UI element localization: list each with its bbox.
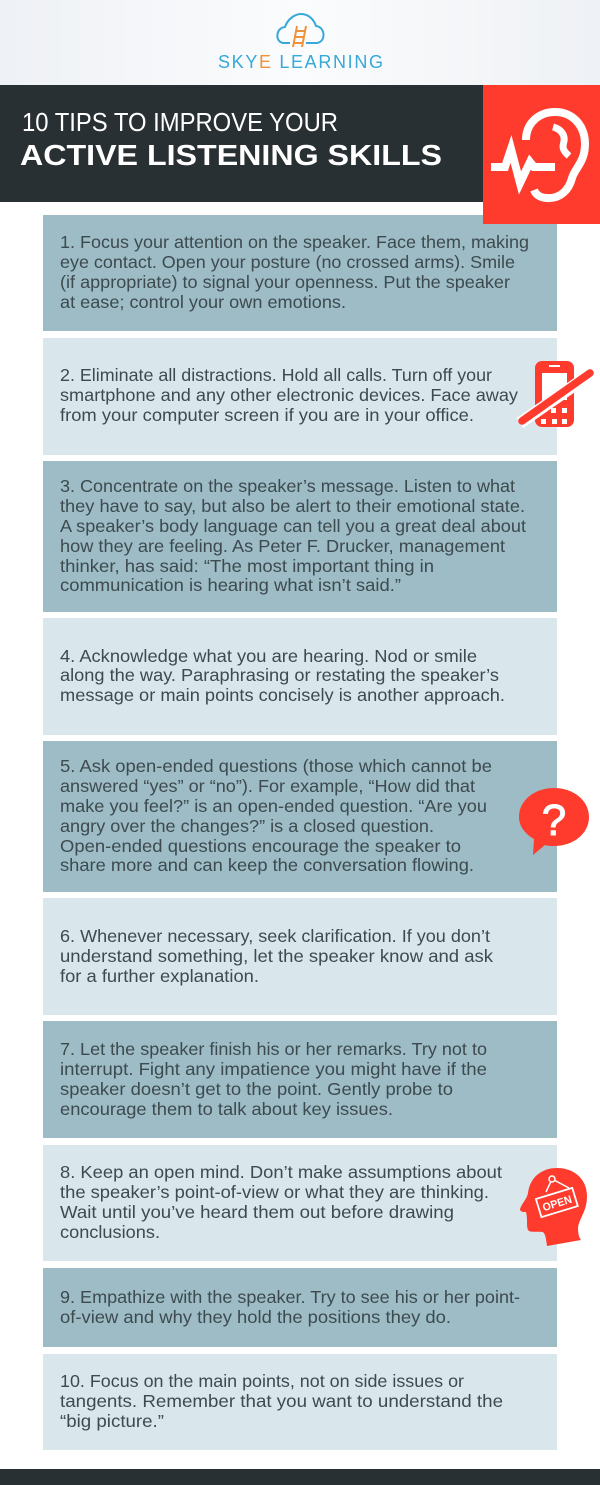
panel: tip 6: [43, 898, 557, 1015]
header band: [0, 85, 600, 202]
panel: tip 9: [43, 1268, 557, 1347]
panel: tip 10: 10. Focus on the main points, not on side issues or: [60, 1371, 464, 1391]
panel: tip 4: message or main points concisely is another approach.: [60, 685, 505, 705]
panel: tip 4: along the way. Paraphrasing or restating the speaker’s: [60, 665, 499, 685]
icon: head with open sign: OPEN: [541, 1194, 573, 1214]
panel: tip 1: (if appropriate) to signal your openness. Put the speaker: [60, 272, 510, 292]
icon: red ear tile: [483, 85, 600, 224]
panel: tip 3: A speaker’s body language can tell you a great deal about: [60, 516, 526, 536]
panel: tip 2: from your computer screen if you are in your office.: [60, 405, 474, 425]
panel: tip 8: the speaker’s point-of-view or what they are thinking.: [60, 1182, 489, 1202]
footer band: [0, 1469, 600, 1485]
icon: crossed-out phone: [520, 361, 592, 427]
panel: tip 8: [43, 1145, 557, 1261]
panel: tip 2: 2. Eliminate all distractions. Hold all calls. Turn off your: [60, 365, 492, 385]
title line 1: 10 TIPS TO IMPROVE YOUR: [22, 107, 338, 137]
icon: question speech bubble: ?: [542, 796, 566, 845]
panel: tip 10: [43, 1354, 557, 1450]
panel: tip 5: 5. Ask open-ended questions (those which cannot be: [60, 756, 492, 776]
panel: tip 3: how they are feeling. As Peter F. Drucker, management: [60, 536, 505, 556]
panel: tip 8: conclusions.: [60, 1222, 160, 1242]
panel: tip 5: [43, 741, 557, 892]
panel: tip 2: smartphone and any other electronic devices. Face away: [60, 385, 518, 405]
panel: tip 5: Open-ended questions encourage the speaker to: [60, 836, 461, 856]
panel: tip 1: 1. Focus your attention on the speaker. Face them, making: [60, 232, 529, 252]
panel: tip 5: share more and can keep the conversation flowing.: [60, 855, 474, 875]
icon: head with open sign: [520, 1168, 587, 1246]
panel: tip 7: interrupt. Fight any impatience you might have if the: [60, 1059, 487, 1079]
title line 2: ACTIVE LISTENING SKILLS: [20, 140, 442, 172]
icon: cloud with ladder: [277, 14, 324, 47]
panel: tip 3: [43, 461, 557, 612]
panel: tip 5: angry over the changes?” is a closed question.: [60, 816, 434, 836]
panel: tip 3: they have to say, but also be alert to their emotional state.: [60, 496, 525, 516]
panel: tip 10: “big picture.”: [60, 1411, 164, 1431]
panel: tip 3: thinker, has said: “The most important thing in: [60, 556, 434, 576]
panel: tip 9: of-view and why they hold the positions they do.: [60, 1307, 451, 1327]
panel: tip 8: 8. Keep an open mind. Don’t make assumptions about: [60, 1162, 502, 1182]
panel: tip 4: [43, 618, 557, 735]
panel: tip 9: 9. Empathize with the speaker. Try to see his or her point-: [60, 1287, 520, 1307]
panel: tip 6: 6. Whenever necessary, seek clarification. If you don’t: [60, 926, 490, 946]
icon: question speech bubble: [519, 788, 589, 855]
panel: tip 3: 3. Concentrate on the speaker’s message. Listen to what: [60, 476, 515, 496]
panel: tip 2: [43, 338, 557, 455]
panel: tip 5: make you feel?” is an open-ended question. “Are you: [60, 796, 487, 816]
panel: tip 6: understand something, let the speaker know and ask: [60, 946, 493, 966]
panel: tip 6: for a further explanation.: [60, 966, 259, 986]
panel: tip 4: 4. Acknowledge what you are hearing. Nod or smile: [60, 646, 477, 666]
panel: tip 1: [43, 215, 557, 331]
panel: tip 1: eye contact. Open your posture (no crossed arms). Smile: [60, 252, 515, 272]
panel: tip 7: encourage them to talk about key issues.: [60, 1099, 393, 1119]
panel: tip 1: at ease; control your own emotions.: [60, 292, 346, 312]
panel: tip 10: tangents. Remember that you want to understand the: [60, 1391, 503, 1411]
panel: tip 7: 7. Let the speaker finish his or her remarks. Try not to: [60, 1039, 487, 1059]
logo band: [0, 0, 600, 85]
panel: tip 7: [43, 1021, 557, 1138]
panel: tip 7: speaker doesn’t get to the point. Gently probe to: [60, 1079, 453, 1099]
logo wordmark: SKYE LEARNING: [218, 52, 383, 72]
panel: tip 3: communication is hearing what isn’t said.”: [60, 575, 401, 595]
panel: tip 5: answered “yes” or “no”). For example, “How did that: [60, 776, 475, 796]
panel: tip 8: Wait until you’ve heard them out before drawing: [60, 1202, 454, 1222]
logo: Skye Learning: [218, 14, 383, 72]
